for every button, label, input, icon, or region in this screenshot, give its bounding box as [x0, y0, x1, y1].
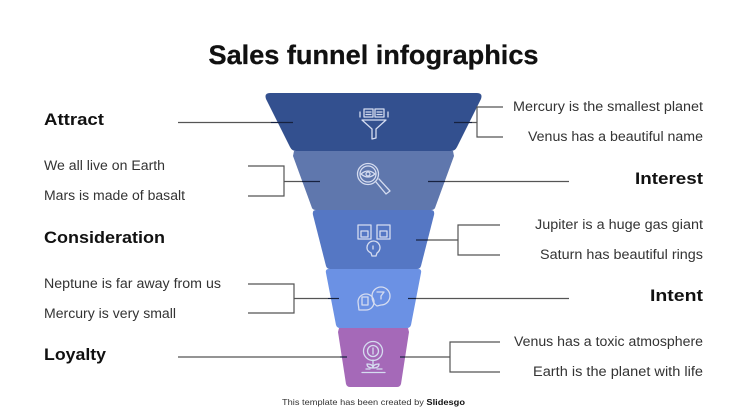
connector: Jupiter / Saturn	[416, 225, 500, 255]
text: We all live on Earth: We all live on Earth	[44, 158, 165, 173]
connector: Mercury / Venus	[454, 107, 503, 137]
funnel stage 2: Interest	[293, 151, 454, 210]
icon: two products and question	[358, 225, 390, 256]
connector: We all live / Mars	[248, 166, 320, 196]
label: Loyalty: Loyalty	[44, 345, 107, 364]
label: Attract: Attract	[44, 110, 104, 129]
icon: coin plant	[362, 342, 385, 372]
text: Mars is made of basalt: Mars is made of basalt	[44, 188, 185, 203]
icon: book funnel	[360, 109, 388, 139]
label: Intent: Intent	[650, 286, 703, 305]
text: Saturn: Saturn has beautiful rings	[540, 247, 703, 262]
text: Venus has a toxic atmosphere: Venus has a toxic atmosphere	[514, 334, 703, 349]
footer credit: This template has been created by Slidesgo	[282, 397, 465, 407]
icon: magnifier with eye	[358, 164, 390, 194]
text: Mercury is the smallest planet: Mercury is the smallest planet	[513, 99, 703, 114]
funnel stage 1: Attract	[266, 93, 482, 151]
funnel	[266, 93, 482, 387]
text: Jupiter: Jupiter is a huge gas giant	[535, 217, 703, 232]
label: Consideration: Consideration	[44, 228, 165, 247]
label: Interest: Interest	[635, 169, 703, 188]
connector: Loyalty	[178, 356, 347, 358]
connector: Venus / Earth	[400, 342, 500, 372]
connector: Attract	[178, 122, 293, 124]
text: Neptune: Neptune is far away from us	[44, 276, 221, 291]
funnel stage 5: Loyalty	[338, 328, 409, 387]
title: Sales funnel infographics	[208, 40, 538, 70]
funnel stage 4: Intent	[326, 269, 421, 328]
funnel stage 3: Consideration	[313, 210, 434, 269]
connector: Interest	[428, 180, 569, 182]
text: Venus has a beautiful name: Venus has a beautiful name	[528, 129, 703, 144]
icon: speech bubbles	[358, 287, 390, 310]
text: Earth is the planet with life: Earth is the planet with life	[533, 364, 703, 379]
text: Mercury is very small: Mercury is very small	[44, 306, 176, 321]
connector: Intent	[408, 298, 569, 300]
connector: Neptune / Mercury	[248, 284, 339, 313]
